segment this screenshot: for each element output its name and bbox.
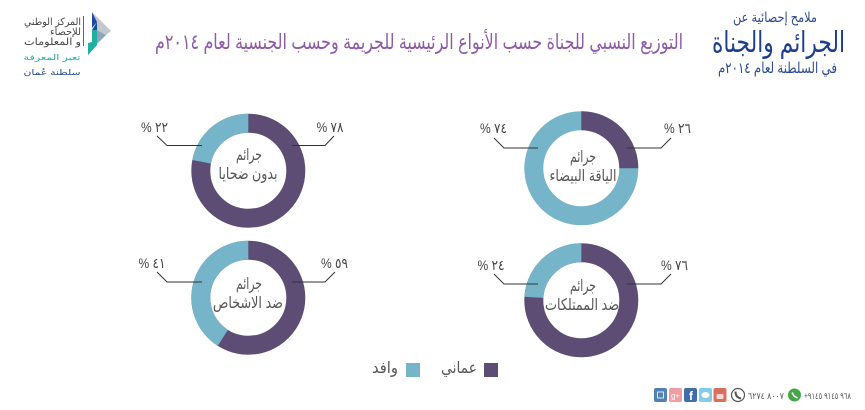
sub title: في السلطنة لعام ٢٠١٤م	[718, 60, 837, 78]
donut: victimless crimes: بدون ضحايا	[218, 166, 278, 184]
legend	[372, 360, 498, 378]
whatsapp number: +٩٦٨ ٩١٤٥ ٩١٤٥	[804, 391, 851, 401]
donut: white collar crimes: ٧٤ %	[480, 120, 507, 136]
footer: contact and social icons: g+	[671, 392, 680, 400]
chart heading: التوزيع النسبي للجناة حسب الأنواع الرئيسية للجريمة وحسب الجنسية لعام ٢٠١٤م	[155, 29, 683, 54]
donut: crimes against property: ٢٤ %	[478, 257, 504, 273]
header: title block	[712, 9, 845, 78]
icon: facebook	[684, 388, 697, 402]
logo: و المعلومات	[24, 37, 81, 48]
legend: Omani	[484, 363, 498, 377]
logo mark	[92, 12, 111, 35]
donut: victimless crimes: ٢٢ %	[141, 119, 168, 135]
donut: white collar crimes: جرائم	[570, 149, 596, 167]
icon: instagram	[654, 388, 667, 402]
donut: crimes against property: ٧٦ %	[661, 257, 688, 273]
icon: whatsapp	[788, 388, 801, 402]
donut: crimes against persons: ٤١ %	[138, 255, 166, 271]
icon: phone	[732, 388, 744, 402]
icon: google plus	[669, 388, 682, 402]
logo: للإحصاء	[50, 27, 81, 38]
donut: crimes against persons: جرائم	[236, 276, 262, 294]
logo: تعبر المعرفة	[24, 53, 80, 62]
icon: youtube	[714, 388, 726, 402]
kicker text: ملامح إحصائية عن	[733, 9, 817, 26]
logo text: المركز الوطني	[24, 17, 81, 28]
logo: سلطنة عُمان	[24, 68, 81, 77]
donut: victimless crimes	[141, 115, 344, 226]
legend: عماني	[441, 360, 477, 378]
legend: وافد	[372, 360, 398, 378]
donut: crimes against persons: ٥٩ %	[321, 255, 348, 271]
footer: contact and social icons: f	[689, 389, 694, 403]
donut: crimes against property: جرائم	[570, 278, 596, 296]
donut: crimes against persons	[138, 232, 348, 363]
donut: victimless crimes: جرائم	[236, 147, 262, 165]
donut: crimes against property	[478, 250, 688, 351]
donut: white collar crimes	[480, 120, 691, 216]
legend: expatriate	[406, 363, 420, 377]
donut: victimless crimes: ٧٨ %	[316, 119, 344, 135]
donut: white collar crimes: الياقة البيضاء	[550, 168, 616, 185]
donut: white collar crimes: ٢٦ %	[664, 120, 691, 136]
donut: crimes against property: ضد الممتلكات	[545, 297, 619, 314]
logo	[24, 12, 111, 77]
icon: twitter	[699, 388, 712, 402]
footer: contact and social icons	[654, 388, 851, 403]
phone number: ٨٠٠٧ ٦٢٧٤	[748, 391, 784, 401]
donut: crimes against persons: ضد الاشخاص	[213, 295, 283, 313]
